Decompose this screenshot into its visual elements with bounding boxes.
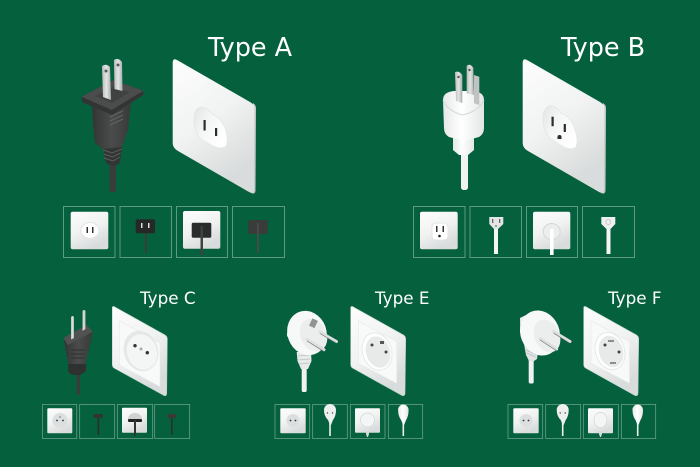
thumbnail frame row C [42, 404, 190, 438]
plug pin face [136, 219, 155, 253]
icon: Type B plug [443, 65, 484, 190]
plug pin face [324, 404, 336, 436]
thumbnail frame row F [508, 404, 656, 438]
icon: Type A plug [82, 59, 143, 192]
thumbnails: Type B [414, 206, 634, 258]
plug back [601, 217, 615, 254]
icon: Type B wall socket [523, 59, 606, 194]
socket front [280, 408, 306, 433]
title: Type E: Type E [374, 288, 429, 308]
plug back [248, 220, 268, 253]
thumbnails: Type E [275, 404, 423, 438]
plug pin face [557, 404, 569, 436]
title: Type C: Type C [139, 288, 196, 308]
plug back [398, 404, 409, 436]
plug inserted [588, 408, 613, 437]
socket front [47, 408, 72, 433]
thumbnail frame row E [275, 404, 423, 438]
plug inserted [533, 212, 570, 255]
plug inserted [183, 211, 220, 255]
thumbnails: Type C [42, 404, 190, 438]
socket front [71, 212, 108, 249]
title: Type A: Type A [207, 33, 293, 63]
plug back [167, 414, 176, 435]
icon: Type E plug [281, 305, 336, 392]
thumbnails: Type A [64, 206, 284, 258]
socket front [513, 408, 539, 433]
icon: Type C plug [63, 310, 93, 395]
thumbnail frame row A [64, 206, 284, 258]
title: Type B: Type B [560, 33, 645, 63]
thumbnail frame row B [414, 206, 634, 258]
icon: Type F plug [513, 304, 570, 384]
plug inserted [122, 408, 147, 436]
socket front [420, 212, 458, 249]
title: Type F: Type F [607, 288, 662, 308]
icon: Type A wall socket [173, 59, 256, 194]
plug pin face [94, 414, 103, 435]
plug inserted [355, 408, 380, 437]
icon: Type F wall socket [584, 306, 639, 396]
icon: Type E wall socket [351, 306, 406, 396]
plug pin face [489, 217, 503, 254]
icon: Type C wall socket [112, 306, 167, 396]
plug back [632, 405, 643, 436]
thumbnails: Type F [508, 404, 656, 438]
